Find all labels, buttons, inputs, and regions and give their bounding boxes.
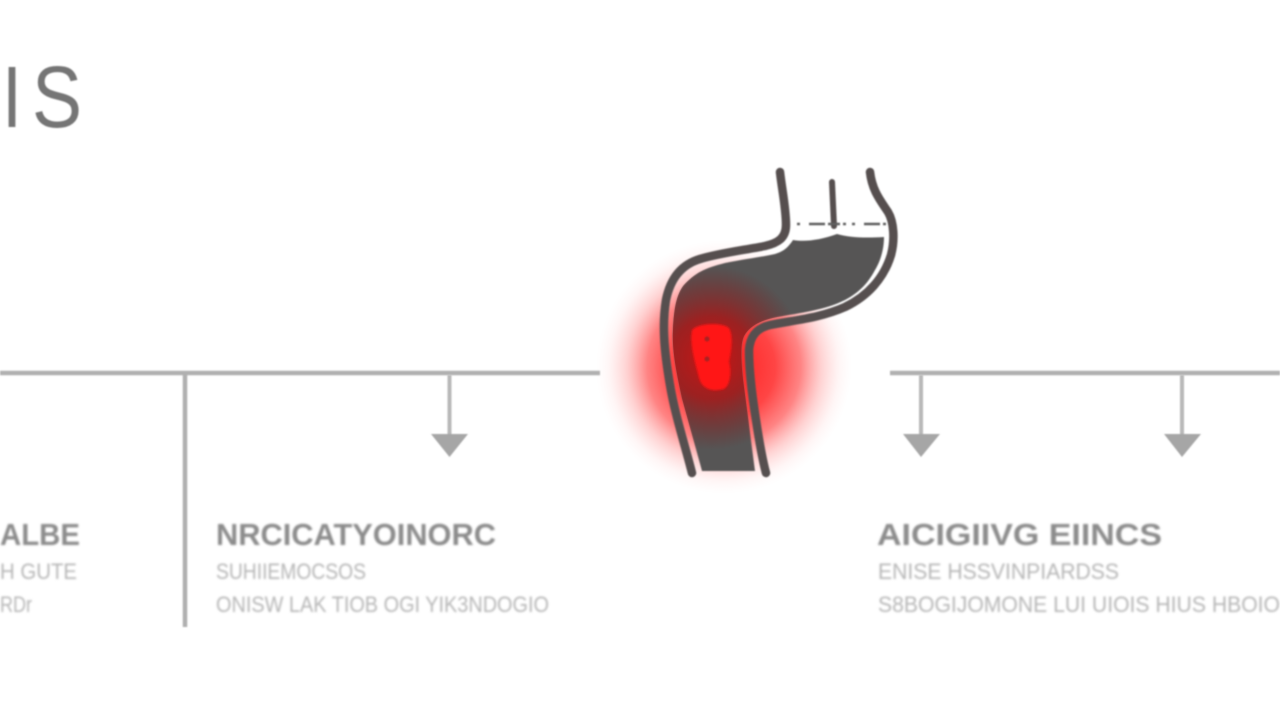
title: I — [2, 49, 22, 146]
text block: centre left — [216, 517, 549, 617]
lesion spots — [704, 336, 710, 362]
esophagus lumen — [673, 234, 884, 471]
inflammation inside lumen — [672, 271, 786, 442]
text block: far left — [0, 517, 80, 617]
arrow: right two — [1164, 375, 1201, 457]
text block: centre left: NRCICATYOINORC — [216, 517, 496, 552]
esophagus outer wall and white lining — [664, 172, 893, 473]
text block: right: AICIGIIVG EIINCS — [877, 517, 1162, 552]
icon: inflamed esophagus — [596, 172, 893, 494]
text block: far left: ALBE — [0, 517, 80, 552]
text block: right — [877, 517, 1280, 617]
text block: centre left: SUHIIEMOCSOS — [216, 559, 366, 584]
title — [2, 49, 82, 146]
title: S — [32, 49, 82, 146]
central fold — [832, 182, 834, 226]
arrow: middle left — [431, 375, 468, 457]
bright red lesion — [691, 324, 732, 390]
text block: centre left: ONISW LAK TIOB OGI YIK3NDOGIO — [216, 592, 549, 617]
timeline connector: left — [0, 373, 600, 627]
dotted sphincter line — [797, 223, 886, 225]
timeline connector: right — [890, 371, 1280, 375]
text block: right: ENISE HSSVINPIARDSS — [878, 559, 1119, 584]
text block: far left: H GUTE — [0, 559, 77, 584]
red glow — [596, 240, 852, 494]
arrow: right one — [903, 375, 940, 457]
text block: far left: RDr — [0, 592, 32, 617]
